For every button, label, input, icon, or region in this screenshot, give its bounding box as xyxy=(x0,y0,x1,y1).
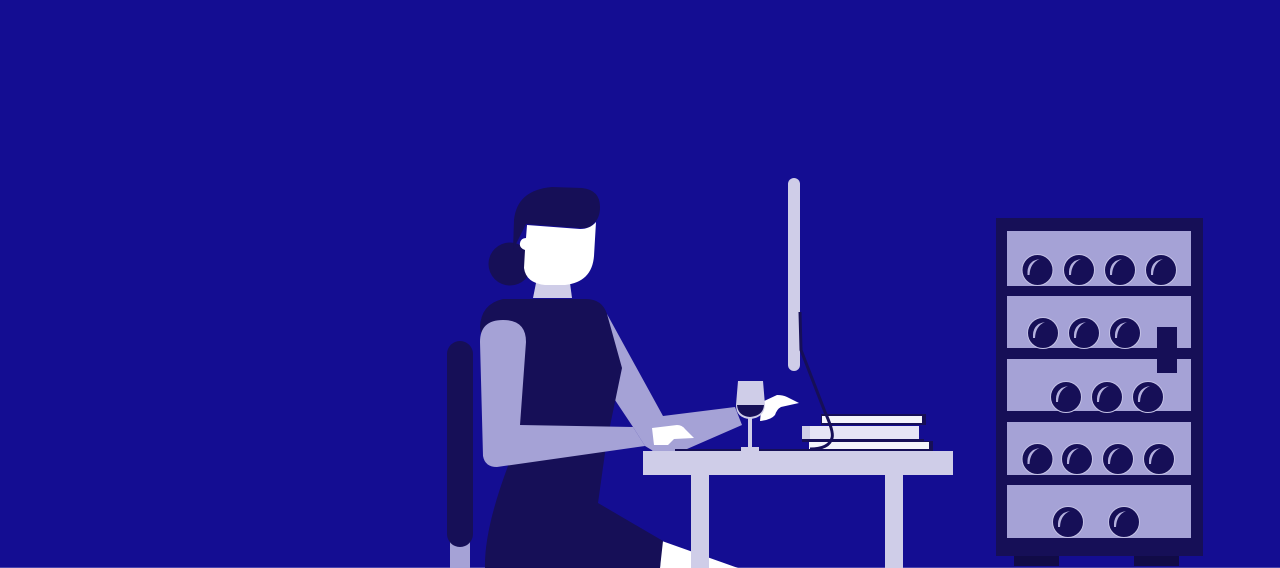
computer monitor xyxy=(788,178,800,371)
near arm xyxy=(480,320,645,467)
bottle highlights row 2 xyxy=(1033,322,1127,338)
hair xyxy=(513,187,600,250)
bottle highlights row 1 xyxy=(1027,259,1163,275)
bottles row 3 xyxy=(1050,382,1164,412)
torso and skirt xyxy=(480,299,663,568)
far arm xyxy=(607,314,742,455)
woman figure xyxy=(480,187,742,568)
hair bun xyxy=(488,242,532,286)
bottles row 2 xyxy=(1028,318,1140,348)
bottles row 1 xyxy=(1022,254,1176,286)
face xyxy=(520,222,596,285)
bottle highlights row 3 xyxy=(1056,386,1150,402)
chair xyxy=(447,341,473,568)
near hand xyxy=(650,425,694,455)
shelf panels xyxy=(1007,231,1191,538)
wine rack xyxy=(996,218,1203,566)
bottle highlights row 4 xyxy=(1027,448,1161,464)
rack frame xyxy=(996,218,1203,556)
desk xyxy=(643,449,953,568)
rack feet xyxy=(1014,555,1059,566)
bottle highlights row 5 xyxy=(1058,511,1126,527)
stack of books xyxy=(802,414,933,451)
rack handle xyxy=(1157,327,1177,373)
far hand xyxy=(760,395,799,421)
legs xyxy=(660,541,738,568)
monitor cable xyxy=(800,312,832,449)
bottles row 5 xyxy=(1052,506,1140,538)
bottles row 4 xyxy=(1022,444,1174,474)
wine glass xyxy=(736,381,765,452)
neck xyxy=(533,283,572,298)
